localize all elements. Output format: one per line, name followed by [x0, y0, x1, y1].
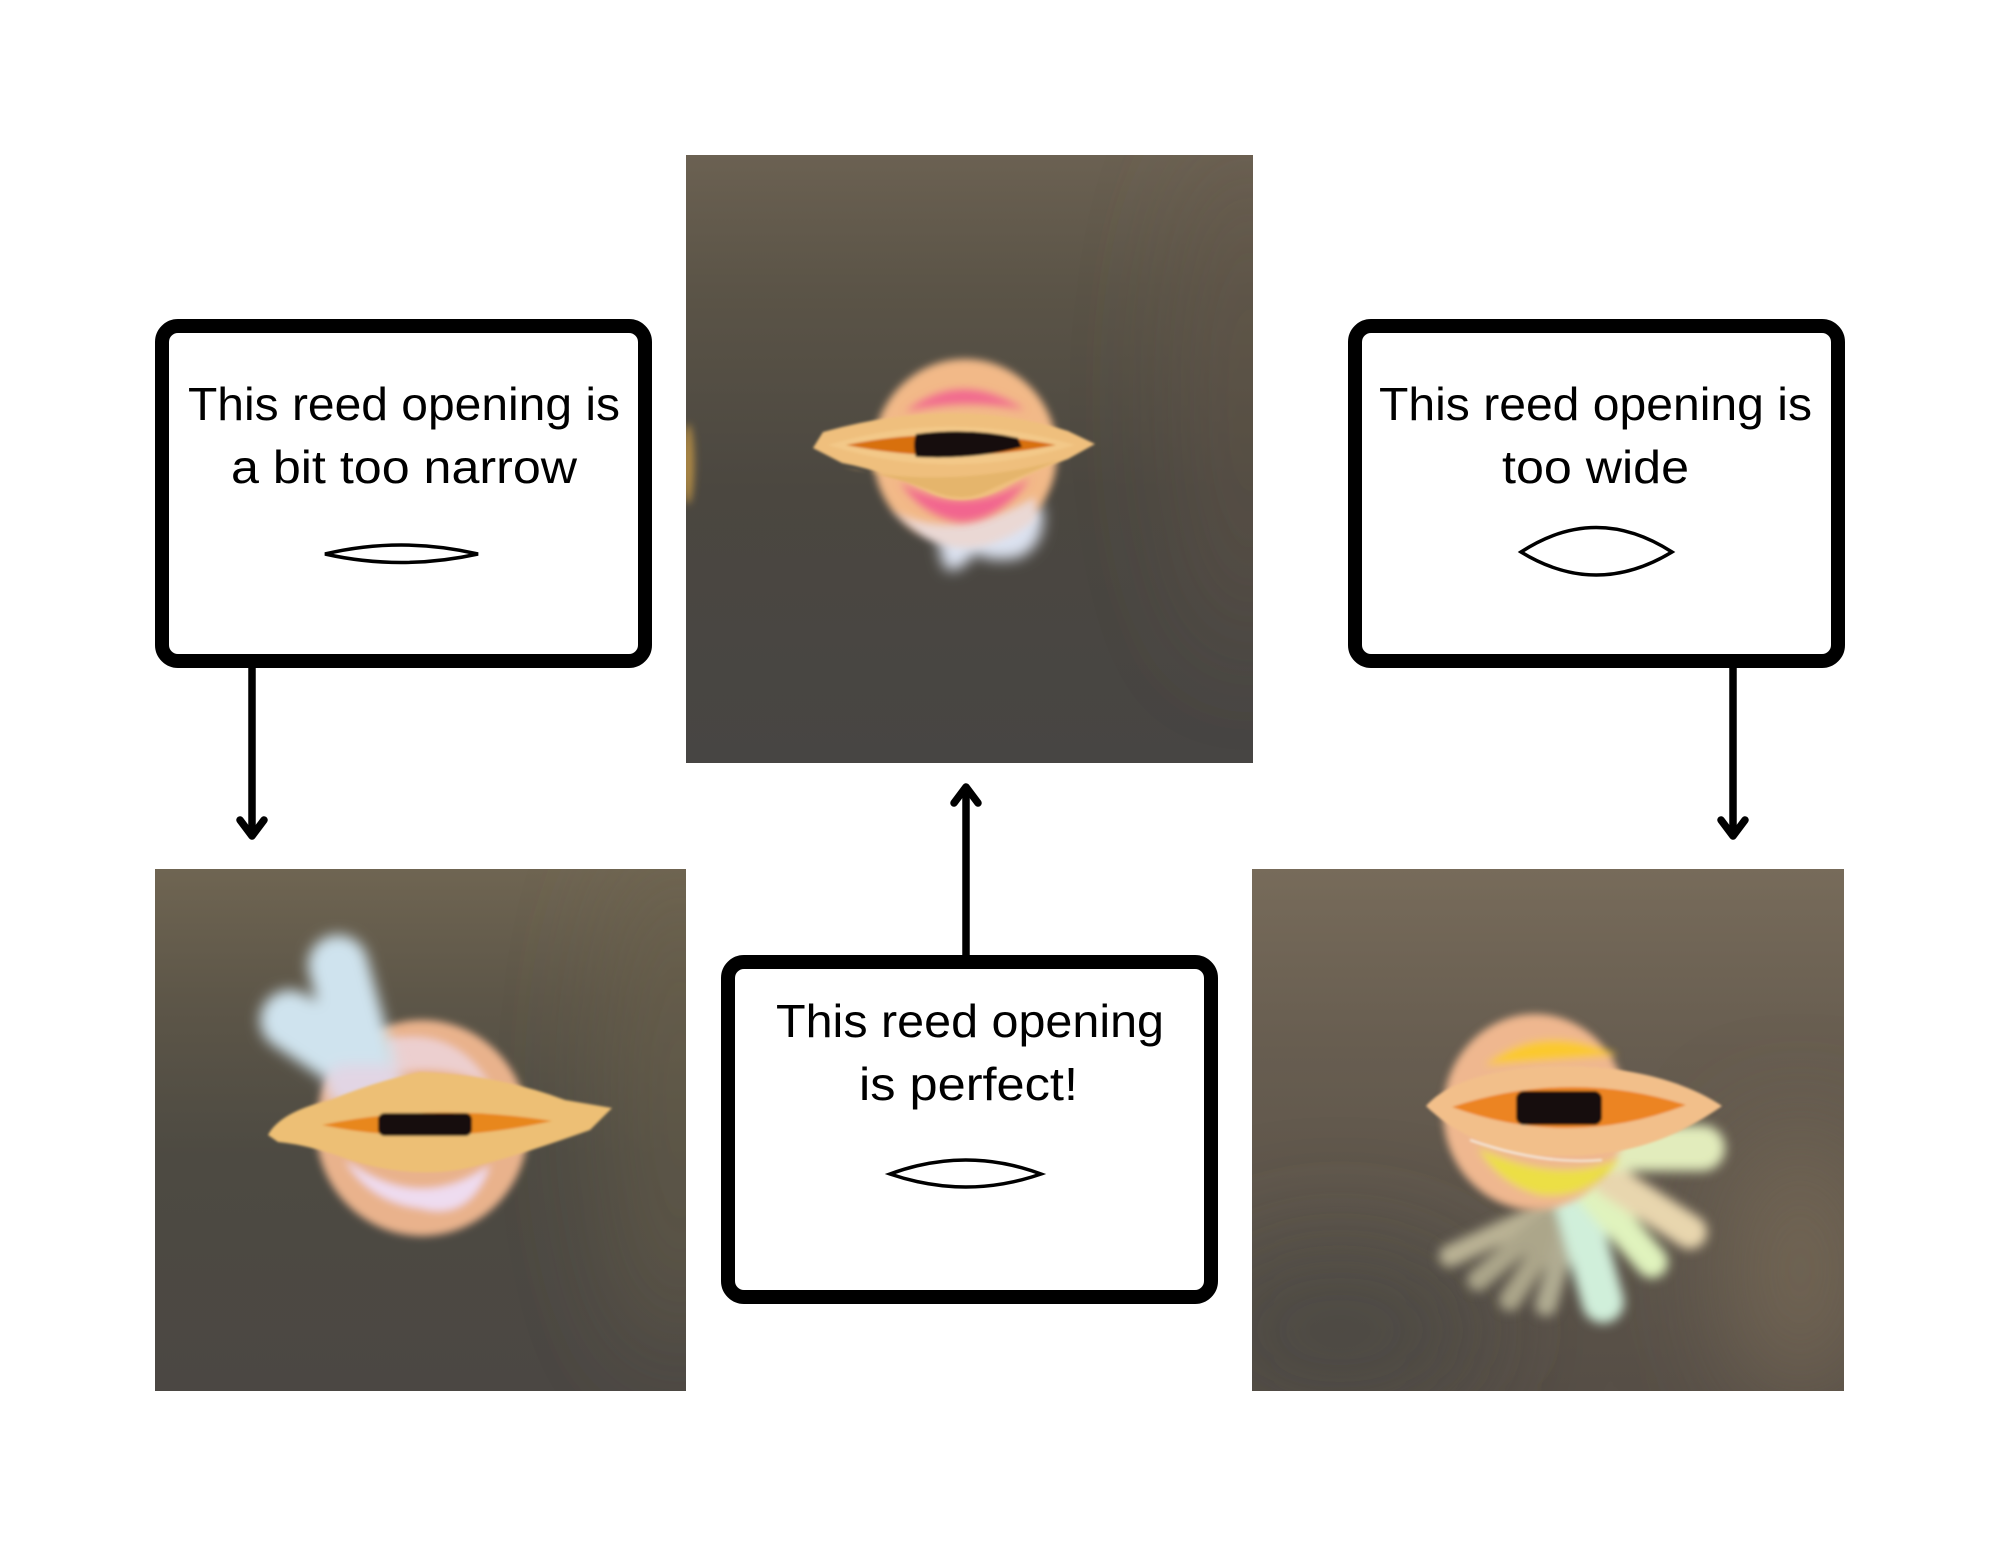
icon: narrow opening	[325, 545, 478, 562]
photo: wide reed opening	[1252, 869, 1844, 1391]
photo: narrow reed opening	[155, 869, 686, 1391]
reed blades	[1426, 1066, 1722, 1161]
icon: wide opening	[1521, 528, 1672, 575]
tassels	[1450, 1148, 1702, 1305]
reed blades	[268, 1072, 612, 1172]
callout text: perfect	[776, 995, 1164, 1110]
callout text: too narrow: a bit too narrow	[231, 441, 578, 493]
arrow: narrow callout to left photo	[240, 668, 264, 836]
callout text: too narrow: This reed opening is	[188, 378, 620, 430]
icon: perfect opening	[890, 1160, 1041, 1187]
photo: perfect reed opening	[686, 155, 1253, 763]
callout text: too wide: This reed opening is	[1379, 378, 1812, 430]
callout text: perfect: This reed opening	[776, 995, 1164, 1047]
callout: too wide	[1355, 326, 1838, 661]
callout text: too wide	[1379, 378, 1812, 493]
callout text: too wide: too wide	[1502, 441, 1689, 493]
callout: perfect	[728, 962, 1211, 1297]
arrow: wide callout to right photo	[1721, 668, 1745, 836]
callout: too narrow	[162, 326, 645, 661]
callout text: too narrow	[188, 378, 620, 493]
white tuft	[290, 965, 385, 1085]
arrow: perfect callout to top photo	[954, 787, 978, 955]
reed blades	[813, 413, 1095, 500]
callout text: perfect: is perfect!	[859, 1058, 1078, 1110]
